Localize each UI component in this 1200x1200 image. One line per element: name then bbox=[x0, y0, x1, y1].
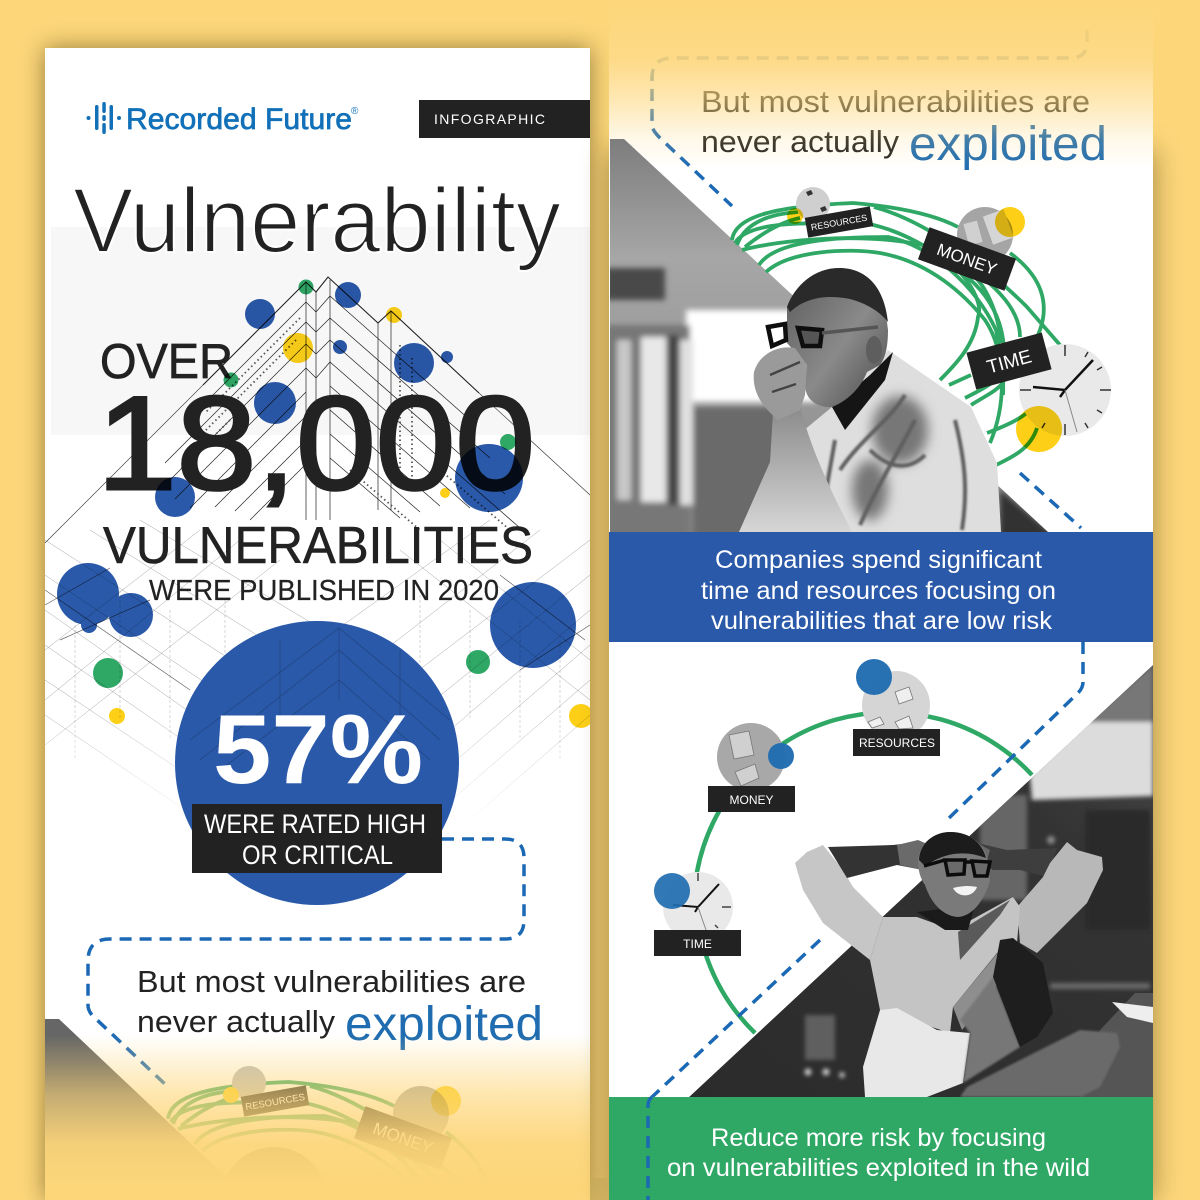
hands bbox=[897, 840, 990, 870]
yellow dot bbox=[1016, 406, 1062, 452]
arrow: dashed connector left bbox=[88, 839, 524, 1086]
title: Vulnerability bbox=[73, 170, 561, 272]
published label: WERE PUBLISHED IN 2020 bbox=[149, 575, 499, 607]
registered mark: ® bbox=[351, 106, 359, 117]
ear bbox=[866, 336, 882, 364]
panel: left column bbox=[45, 48, 593, 1200]
smile bbox=[953, 886, 977, 895]
heading: exploited repeated: never actually bbox=[701, 124, 900, 159]
vertical detail bbox=[75, 590, 560, 760]
photo: stressed background bbox=[600, 139, 1060, 540]
neck bbox=[917, 905, 975, 930]
green tangled lines bbox=[732, 203, 1060, 465]
heading: exploited repeated: But most vulnerabilities are bbox=[701, 84, 1090, 119]
shirt bbox=[739, 350, 1001, 532]
resources label bbox=[853, 729, 940, 756]
shirt shading bbox=[852, 396, 928, 520]
time label bbox=[654, 930, 741, 956]
blue dot bbox=[856, 659, 892, 695]
tag: infographic: INFOGRAPHIC bbox=[434, 111, 545, 127]
tag: infographic bbox=[419, 100, 590, 138]
glasses bbox=[768, 324, 878, 346]
blue dot bbox=[768, 743, 794, 769]
icon: resources circle lower: RESOURCES bbox=[859, 736, 935, 750]
vulnerabilities label: VULNERABILITIES bbox=[103, 517, 533, 575]
forearm and sleeve bbox=[739, 405, 852, 532]
left sleeve bbox=[795, 845, 883, 960]
subheading: exploited: never actually bbox=[137, 1004, 336, 1039]
resources label: RESOURCES bbox=[810, 213, 868, 232]
heading: exploited repeated bbox=[701, 84, 1107, 171]
logo wordmark: Recorded Future bbox=[126, 103, 352, 136]
subheading: exploited: But most vulnerabilities are bbox=[137, 964, 526, 999]
photo: relaxed background bbox=[689, 665, 1153, 1097]
percentage: 57% bbox=[213, 694, 423, 804]
yellow fade overlay bbox=[45, 1035, 590, 1185]
hair bbox=[919, 832, 986, 866]
band: green message bbox=[609, 1097, 1153, 1200]
band: blue message: vulnerabilities that are low risk bbox=[711, 607, 1052, 635]
panel: right column bbox=[600, 0, 1153, 1200]
decorative circles bbox=[57, 280, 593, 728]
building outline bbox=[203, 277, 479, 393]
callout box bbox=[192, 804, 442, 873]
arrow: dashed connector lower bbox=[652, 642, 1083, 1097]
other leg bbox=[960, 1030, 1120, 1097]
left panel shadow bbox=[45, 48, 590, 1200]
chart: building blueprint bbox=[45, 277, 590, 830]
faded photo preview: RESOURCES bbox=[245, 1092, 306, 1113]
grey header band bbox=[51, 227, 590, 435]
money label: MONEY bbox=[934, 240, 999, 279]
logo: Recorded Future bbox=[86, 102, 359, 136]
band: blue message: Companies spend significant bbox=[715, 546, 1042, 574]
hand bbox=[754, 347, 807, 420]
bottom shadow patch bbox=[590, 1178, 609, 1200]
stat block: 18,000 vulnerabilities bbox=[97, 335, 535, 607]
blue dot bbox=[654, 873, 690, 909]
building outline lower bbox=[45, 385, 590, 543]
band: blue message bbox=[609, 532, 1153, 642]
yellow dot bbox=[787, 208, 803, 224]
arrow: dashed connector middle bbox=[1020, 473, 1081, 528]
icon: clock lower: TIME bbox=[683, 937, 712, 951]
glasses bbox=[924, 860, 990, 876]
icon: logo mark bbox=[86, 102, 121, 134]
lower diagonal grid bbox=[45, 520, 590, 820]
subheading: exploited: exploited bbox=[345, 998, 543, 1051]
arrow: dashed connector top bbox=[652, 30, 1087, 206]
left forearm bbox=[828, 842, 923, 878]
heading: exploited repeated: exploited bbox=[909, 118, 1107, 171]
collar shadow bbox=[832, 352, 893, 430]
icon: resources circle lower bbox=[853, 659, 940, 756]
icon: money circle lower: MONEY bbox=[729, 793, 774, 807]
big number: 18,000 bbox=[97, 370, 535, 518]
head bbox=[918, 832, 990, 917]
lines over circle bbox=[190, 628, 450, 770]
man: relaxed bbox=[795, 832, 1120, 1097]
building hatch lines bbox=[160, 280, 520, 528]
over label: OVER bbox=[100, 335, 233, 389]
shirt wrinkles bbox=[820, 395, 965, 530]
top fade overlay bbox=[609, 0, 1153, 170]
finger shadow bbox=[770, 362, 800, 392]
right sleeve bbox=[1017, 842, 1103, 953]
green arc bbox=[696, 712, 1032, 1033]
arrow: dashed connector bottom bbox=[648, 1097, 652, 1200]
band: green message: Reduce more risk by focusing bbox=[711, 1124, 1046, 1152]
hair bbox=[787, 268, 888, 322]
icon: clock top bbox=[966, 333, 1111, 452]
right panel shadow bbox=[609, 150, 1153, 1200]
faded photo preview bbox=[45, 1019, 474, 1160]
icon: clock lower bbox=[654, 872, 741, 956]
body shirt bbox=[870, 897, 1020, 1033]
band: green message: on vulnerabilities exploited in the wild bbox=[667, 1154, 1090, 1182]
callout text: OR CRITICAL bbox=[242, 840, 393, 870]
thigh bbox=[863, 1008, 970, 1097]
money label bbox=[708, 786, 795, 812]
shoe bbox=[993, 938, 1053, 1047]
dotted detail strips bbox=[180, 318, 510, 530]
shirt plain fold bbox=[953, 950, 1005, 1030]
band: blue message: time and resources focusing on bbox=[701, 577, 1056, 605]
icon: resources circle bbox=[787, 187, 873, 238]
stat circle: 57% bbox=[175, 621, 459, 905]
time label bbox=[966, 333, 1052, 389]
head bbox=[787, 268, 888, 407]
man: stressed bbox=[739, 268, 1001, 532]
calf bbox=[960, 977, 1020, 1083]
callout text: WERE RATED HIGH bbox=[204, 809, 426, 839]
icon: money circle lower bbox=[708, 723, 795, 812]
shirt dark fold bbox=[958, 900, 1010, 960]
dark accents upper grid bbox=[45, 568, 590, 690]
right forearm bbox=[977, 843, 1057, 877]
subheading: exploited bbox=[137, 964, 543, 1051]
time label: TIME bbox=[985, 346, 1034, 378]
icon: money circle bbox=[918, 207, 1025, 291]
faded photo preview: MONEY bbox=[370, 1119, 435, 1158]
